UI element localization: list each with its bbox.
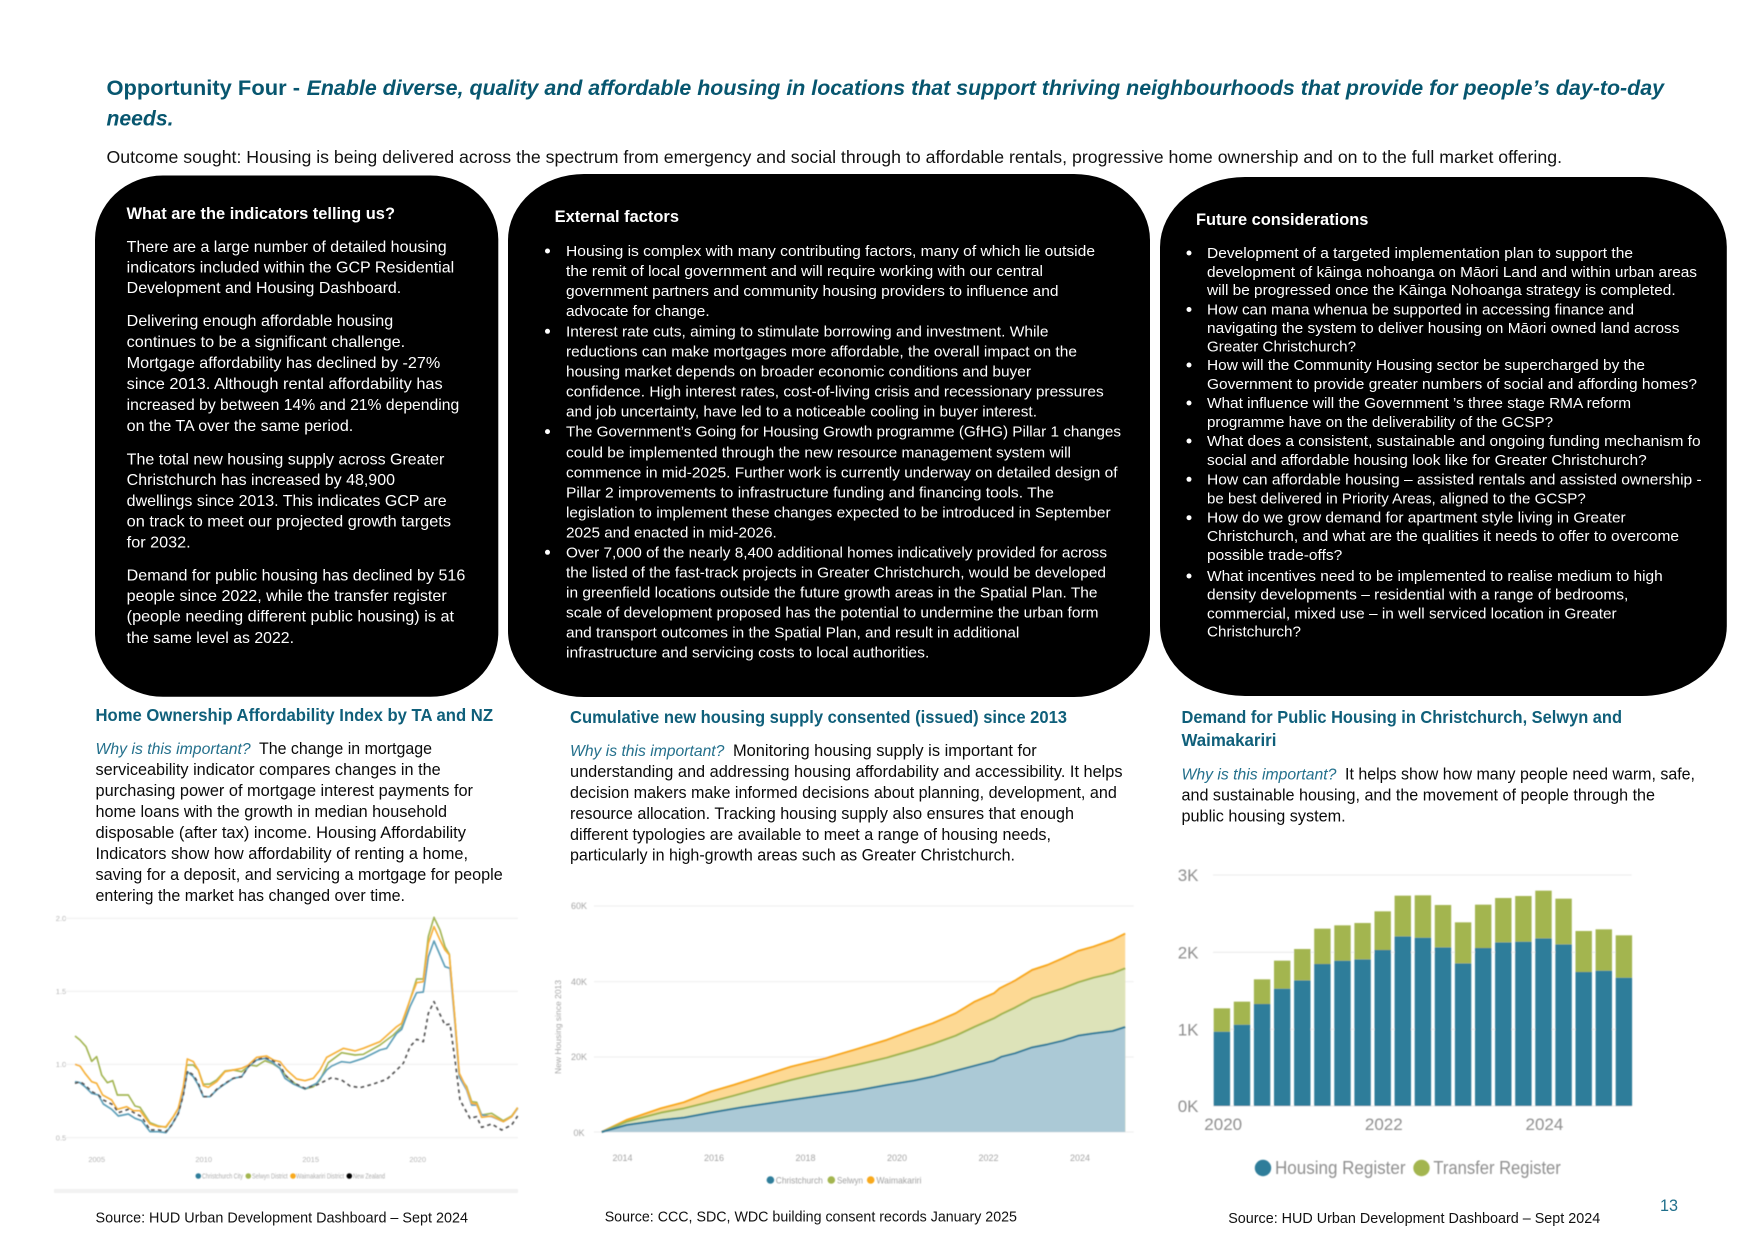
text block: indicators: on the TA over the same period. <box>127 418 353 435</box>
text block: indicators <box>127 239 466 647</box>
bullet list: external factors: advocate for change. <box>566 303 710 320</box>
bullet list: future considerations: What does a consistent, sustainable and ongoing funding mechanism fo <box>1207 434 1701 450</box>
x axis labels <box>612 1153 1090 1163</box>
source note: chart two: Source: CCC, SDC, WDC building consent records January 2025 <box>605 1210 1017 1226</box>
text block: why home ownership affordability is important: Why is this important? <box>96 741 251 758</box>
legend <box>196 1172 385 1180</box>
text block: why housing supply is important: understanding and addressing housing affordability and accessibility. It helps <box>570 763 1122 781</box>
bullet list: future considerations: Christchurch, and what are the qualities it needs to offer to overcome <box>1207 529 1679 545</box>
chart heading: cumulative new housing supply: Cumulative new housing supply consented (issued) since 2013 <box>570 707 1067 727</box>
stacked bar chart: demand for public housing <box>1178 866 1632 1178</box>
text block: indicators: for 2032. <box>127 535 191 552</box>
bullet list: external factors <box>545 243 1121 661</box>
text block: why public housing demand is important: public housing system. <box>1182 807 1346 825</box>
y axis labels <box>56 914 66 1142</box>
x axis labels: 2024 <box>1070 1153 1090 1163</box>
bullet list: future considerations: density developments – residential with a range of bedrooms, <box>1207 588 1628 604</box>
text block: why home ownership affordability is important: saving for a deposit, and servicing a mortgage for people <box>96 866 503 884</box>
stacked areas <box>602 934 1125 1132</box>
text block: why housing supply is important: decision makers make informed decisions about planning, development, and <box>570 784 1117 802</box>
bullet list: external factors: confidence. High interest rates, cost-of-living crisis and recessionary pressures <box>566 384 1104 400</box>
text block: indicators: dwellings since 2013. This indicates GCP are <box>127 493 447 510</box>
x axis labels: 2020 <box>887 1153 907 1163</box>
x axis labels <box>88 1155 426 1164</box>
bullet list: future considerations: development of kāinga nohoanga on Māori Land and within urban areas <box>1207 265 1697 281</box>
title: Opportunity Four - <box>106 75 300 100</box>
text block: indicators: on track to meet our projected growth targets <box>127 514 451 531</box>
text block: why housing supply is important: Why is this important? <box>570 743 724 760</box>
x axis labels: 2016 <box>704 1153 724 1163</box>
legend <box>1255 1158 1561 1178</box>
bullet list: external factors: housing market depends on broader economic conditions and buyer <box>566 363 1031 380</box>
bullet list: external factors: the listed of the fast-track projects in Greater Christchurch, would be developed <box>566 564 1106 581</box>
legend: Selwyn District <box>252 1172 288 1180</box>
y axis labels: 2K <box>1178 944 1199 962</box>
bullet list: external factors: the remit of local government and will require working with our central <box>566 263 1043 280</box>
x axis labels: 2020 <box>409 1155 426 1164</box>
text block: why home ownership affordability is important: The change in mortgage <box>259 740 432 758</box>
text block: indicators: Demand for public housing has declined by 516 <box>127 567 466 584</box>
legend: Waimakariri District <box>296 1172 345 1180</box>
bullet list: future considerations: will be progressed once the Kāinga Nohoanga strategy is completed. <box>1206 283 1676 299</box>
outcome sought text: Outcome sought: Housing is being delivered across the spectrum from emergency and social through to affordable rentals, progressive home ownership and on to the full market offering. <box>106 147 1562 167</box>
y axis labels: 3K <box>1178 866 1199 885</box>
text block: indicators: Delivering enough affordable housing <box>127 313 393 330</box>
y axis labels <box>1178 866 1199 1116</box>
panel: future considerations <box>1160 177 1727 696</box>
legend: Waimakariri <box>876 1175 921 1185</box>
bullet list: external factors: legislation to implement these changes expected to be introduced in September <box>566 504 1111 521</box>
text block: why public housing demand is important <box>1182 765 1695 825</box>
page number: 13 <box>1660 1196 1678 1215</box>
text block: indicators: increased by between 14% and 21% depending <box>127 397 459 414</box>
bullet list: external factors: reductions can make mortgages more affordable, the overall impact on the <box>566 343 1077 360</box>
text block: indicators: since 2013. Although rental affordability has <box>127 376 443 393</box>
bars: housing register <box>1214 936 1632 1106</box>
text block: indicators: There are a large number of detailed housing <box>127 239 447 256</box>
y axis labels <box>571 901 587 1138</box>
bullet list: external factors: Housing is complex with many contributing factors, many of which lie outside <box>566 243 1095 260</box>
legend: Christchurch <box>776 1175 823 1185</box>
bullet list: external factors: and job uncertainty, have led to a noticeable cooling in buyer interest. <box>566 404 1037 421</box>
y axis labels: 40K <box>571 977 587 987</box>
panel: what are the indicators telling us <box>95 176 498 697</box>
y axis labels: 1.0 <box>56 1060 66 1069</box>
source note: chart three: Source: HUD Urban Development Dashboard – Sept 2024 <box>1228 1211 1600 1227</box>
bullet list: external factors: Interest rate cuts, aiming to stimulate borrowing and investment. While <box>566 323 1048 340</box>
bullet list: external factors: commence in mid-2025. Further work is currently underway on detailed design of <box>566 464 1118 481</box>
bullet list: future considerations: possible trade-offs? <box>1207 548 1342 564</box>
text block: indicators: Christchurch has increased by 48,900 <box>127 472 395 489</box>
text block: why home ownership affordability is important: serviceability indicator compares changes in the <box>96 761 441 779</box>
chart heading: demand for public housing <box>1182 707 1622 750</box>
y axis labels: 0K <box>573 1128 585 1138</box>
bullet list: future considerations: navigating the system to deliver housing on Māori owned land across <box>1207 321 1680 337</box>
legend: Selwyn <box>837 1175 863 1185</box>
text block: why housing supply is important: particularly in high-growth areas such as Greater Christchurch. <box>570 847 1015 865</box>
text block: indicators: the same level as 2022. <box>127 630 294 647</box>
bullet list: future considerations: What influence will the Government ’s three stage RMA reform <box>1207 396 1631 412</box>
text block: why home ownership affordability is important: Indicators show how affordability of renting a home, <box>96 845 468 863</box>
y axis title: New Housing since 2013 <box>553 980 563 1074</box>
text block: indicators: The total new housing supply across Greater <box>127 451 444 468</box>
y axis labels: 1K <box>1178 1020 1199 1040</box>
text block: why public housing demand is important: and sustainable housing, and the movement of people through the <box>1182 786 1655 804</box>
legend: New Zealand <box>353 1172 385 1180</box>
text block: indicators: continues to be a significant challenge. <box>127 334 405 351</box>
text block: why public housing demand is important: Why is this important? <box>1182 766 1336 783</box>
area chart: cumulative new housing supply <box>553 901 1134 1185</box>
bullet list: external factors: 2025 and enacted in mid-2026. <box>566 524 777 541</box>
chart heading: demand for public housing: Waimakariri <box>1182 730 1276 750</box>
bullet list: external factors: The Government’s Going for Housing Growth programme (GfHG) Pillar 1 changes <box>566 424 1121 441</box>
bullet list: external factors: infrastructure and servicing costs to local authorities. <box>566 644 929 661</box>
bullet list: future considerations: How can affordable housing – assisted rentals and assisted ownership - <box>1207 472 1702 488</box>
bullet list: future considerations: How will the Community Housing sector be supercharged by the <box>1207 358 1645 374</box>
bullet list: future considerations: How do we grow demand for apartment style living in Greater <box>1207 511 1626 527</box>
x axis labels: 2018 <box>795 1153 816 1163</box>
bullet list: external factors: government partners and community housing providers to influence and <box>566 283 1058 300</box>
bullet list: external factors: could be implemented through the new resource management system will <box>566 444 1071 461</box>
y axis labels: 0.5 <box>56 1134 66 1142</box>
text block: why public housing demand is important: It helps show how many people need warm, safe, <box>1345 765 1695 783</box>
bars: transfer register <box>1214 891 1632 1032</box>
bullet list: future considerations: be best delivered in Priority Areas, aligned to the GCSP? <box>1207 491 1586 507</box>
text block: indicators: Development and Housing Dashboard. <box>127 280 401 297</box>
y axis labels: 20K <box>571 1052 587 1062</box>
legend: Transfer Register <box>1433 1158 1561 1178</box>
panel heading: external factors: External factors <box>555 208 679 226</box>
bullet list: external factors: and transport outcomes in the Spatial Plan, and result in additional <box>566 624 1019 641</box>
text block: why home ownership affordability is important: disposable (after tax) income. Housing Affordability <box>96 824 467 842</box>
x axis labels <box>1204 1115 1563 1134</box>
title: Enable diverse, quality and affordable housing in locations that support thriving neighbourhoods that provide for people’s day-to-day <box>307 75 1665 100</box>
y axis labels: 0K <box>1178 1097 1199 1116</box>
text block: why home ownership affordability is important: purchasing power of mortgage interest payments for <box>96 782 474 800</box>
chart lines <box>75 917 518 1133</box>
x axis labels: 2022 <box>1365 1115 1403 1134</box>
text block: why housing supply is important: Monitoring housing supply is important for <box>733 742 1037 760</box>
bullet list: future considerations: Greater Christchurch? <box>1207 340 1356 356</box>
text block: why home ownership affordability is important: home loans with the growth in median household <box>96 803 447 821</box>
bullet list: future considerations: social and affordable housing look like for Greater Christchurch? <box>1207 453 1647 469</box>
bullet list: external factors: scale of development proposed has the potential to undermine the urban form <box>566 604 1098 621</box>
y axis labels: 60K <box>571 901 587 911</box>
text block: why home ownership affordability is important: entering the market has changed over time. <box>96 887 405 905</box>
bullet list: external factors: Pillar 2 improvements to infrastructure funding and financing tools. The <box>566 484 1054 501</box>
legend <box>767 1175 921 1185</box>
x axis labels: 2014 <box>612 1153 633 1163</box>
text block: why home ownership affordability is important <box>96 740 503 905</box>
x axis labels: 2024 <box>1525 1115 1563 1134</box>
x axis labels: 2015 <box>302 1155 319 1164</box>
bullet list: external factors: in greenfield locations outside the future growth areas in the Spatial Plan. The <box>566 584 1098 601</box>
panel heading: future considerations: Future considerations <box>1196 211 1368 229</box>
bullet list: external factors: Over 7,000 of the nearly 8,400 additional homes indicatively provided for across <box>566 544 1107 561</box>
text block: why housing supply is important: resource allocation. Tracking housing supply also ensures that enough <box>570 805 1074 823</box>
legend: Housing Register <box>1275 1158 1406 1178</box>
legend: Christchurch City <box>202 1172 243 1180</box>
y axis labels: 2.0 <box>56 914 66 923</box>
bullet list: future considerations: Christchurch? <box>1207 625 1301 641</box>
x axis labels: 2020 <box>1204 1115 1242 1134</box>
text block: why housing supply is important <box>570 742 1122 865</box>
panel heading: indicators: What are the indicators telling us? <box>126 205 395 223</box>
panel: external factors <box>508 174 1150 697</box>
chart heading: demand for public housing: Demand for Public Housing in Christchurch, Selwyn and <box>1182 707 1622 727</box>
bullet list: future considerations: What incentives need to be implemented to realise medium to high <box>1207 569 1663 585</box>
bullet list: future considerations: Government to provide greater numbers of social and affording homes? <box>1207 377 1697 393</box>
title: needs. <box>106 106 174 130</box>
text block: indicators: indicators included within the GCP Residential <box>127 260 454 276</box>
bullet list: future considerations: programme have on the deliverability of the GCSP? <box>1207 415 1553 431</box>
text block: indicators: (people needing different public housing) is at <box>127 609 455 626</box>
x axis labels: 2010 <box>195 1155 212 1164</box>
text block: why housing supply is important: different typologies are available to meet a range of housing needs, <box>570 826 1051 844</box>
bullet list: future considerations: commercial, mixed use – in well serviced location in Greater <box>1207 606 1617 622</box>
bullet list: future considerations <box>1186 246 1702 641</box>
bullet list: future considerations: Development of a targeted implementation plan to support the <box>1207 246 1633 262</box>
bullet list: future considerations: How can mana whenua be supported in accessing finance and <box>1207 302 1634 318</box>
text block: indicators: people since 2022, while the transfer register <box>127 588 447 605</box>
title <box>106 75 1665 130</box>
x axis labels: 2022 <box>978 1153 999 1163</box>
y axis labels: 1.5 <box>56 987 66 996</box>
x axis labels: 2005 <box>88 1155 105 1164</box>
source note: chart one: Source: HUD Urban Development Dashboard – Sept 2024 <box>96 1210 468 1226</box>
line chart: home ownership affordability index <box>54 914 518 1193</box>
text block: indicators: Mortgage affordability has declined by -27% <box>127 355 440 372</box>
chart heading: home ownership affordability: Home Ownership Affordability Index by TA and NZ <box>96 705 493 725</box>
